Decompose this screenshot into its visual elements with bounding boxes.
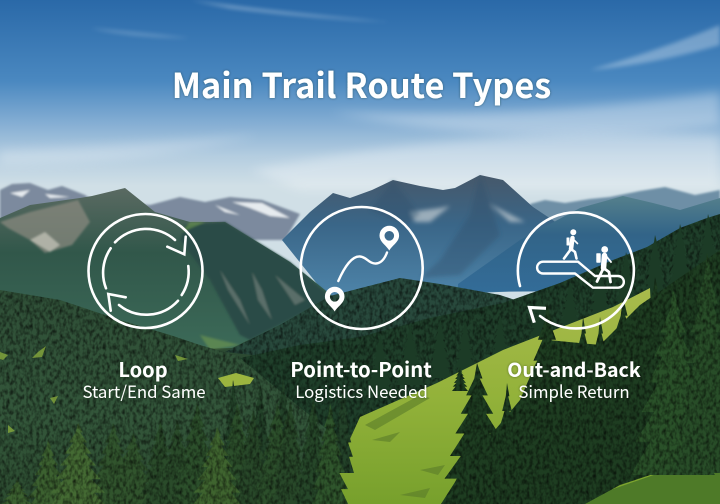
label: out-and-back: Out-and-Back [507, 354, 641, 383]
title: Main Trail Route Types [172, 58, 551, 108]
trees: middle band [366, 214, 720, 395]
meadow patch in forest [218, 373, 254, 387]
label: point-to-point: Point-to-Point [290, 353, 432, 383]
far mountains: left snowy range [0, 183, 300, 240]
label: out-and-back [507, 354, 641, 403]
meadow: sunlit slope [295, 288, 660, 504]
meadow: bottom right grass [570, 452, 720, 504]
icon: hikers on out-and-back path [518, 212, 634, 328]
forest: middle band [240, 214, 720, 440]
trees: right foreground [441, 250, 720, 504]
label: out-and-back: Simple Return [518, 379, 630, 403]
centre mountains [282, 175, 560, 300]
label: point-to-point: Logistics Needed [295, 379, 428, 403]
label: loop: Loop [118, 354, 168, 383]
label: loop [82, 354, 206, 403]
forest: left hillside [0, 290, 360, 504]
route type: loop [82, 214, 206, 403]
trees: left foreground [0, 377, 354, 504]
route type: point-to-point [290, 207, 432, 403]
right mountains [458, 196, 720, 292]
far mountains: right blue range [530, 187, 720, 250]
icon: map pins with winding route [301, 207, 423, 329]
left large mountain [0, 188, 335, 350]
forest ridge: centre [225, 278, 530, 360]
icon: loop circular arrows [88, 214, 202, 328]
label: loop: Start/End Same [82, 379, 206, 403]
route type: out-and-back [507, 212, 641, 403]
label: point-to-point [290, 353, 432, 403]
background: wispy clouds [0, 0, 720, 190]
background: sky [0, 0, 720, 300]
